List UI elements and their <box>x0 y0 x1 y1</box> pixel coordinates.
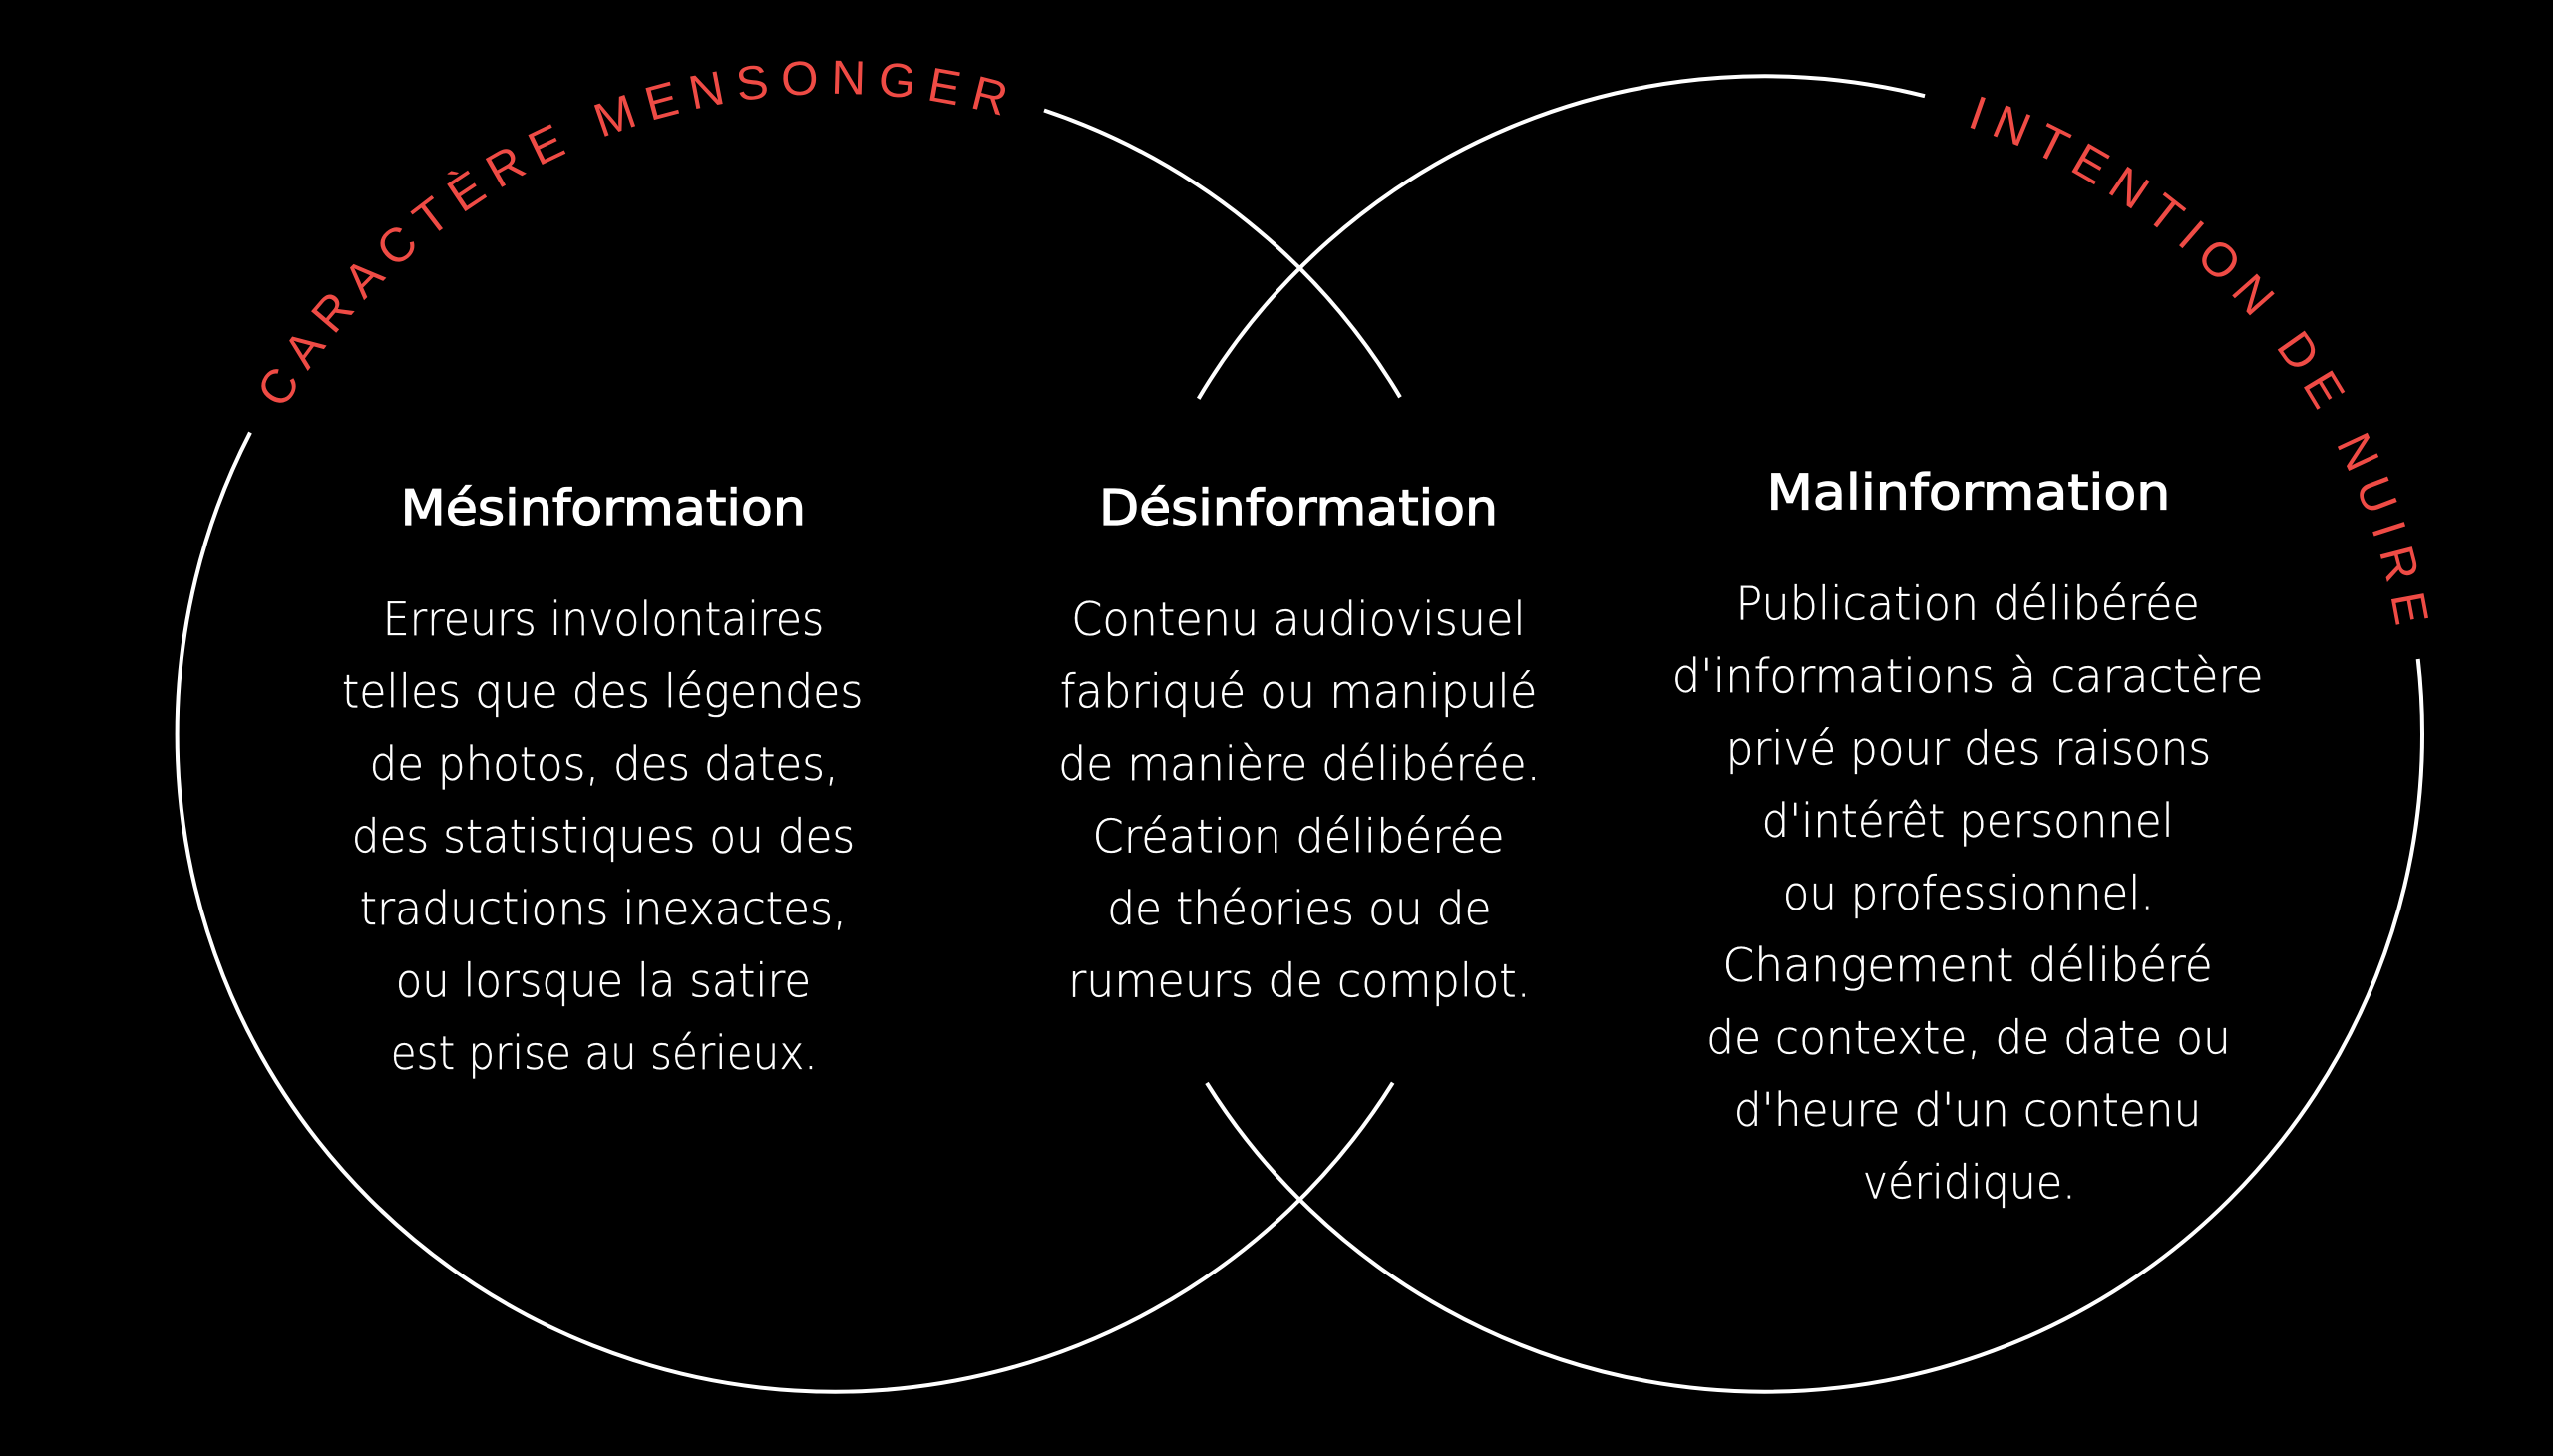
heading: malinformation: Malinformation <box>1767 465 2170 521</box>
text block: mésinformation description: telles que des légendes <box>342 664 863 718</box>
heading: mésinformation: Mésinformation <box>401 480 806 537</box>
text block: mésinformation description: de photos, des dates, <box>370 737 839 791</box>
heading: désinformation: Désinformation <box>1099 480 1498 537</box>
text block: malinformation description: d'informations à caractère <box>1672 649 2264 703</box>
text block: malinformation description: de contexte, de date ou <box>1706 1011 2231 1065</box>
text block: désinformation description: fabriqué ou manipulé <box>1060 664 1537 718</box>
panel: malinformation <box>1672 465 2264 1209</box>
text block: mésinformation description: est prise au sérieux. <box>391 1026 818 1080</box>
text block: malinformation description: Publication délibérée <box>1735 576 2200 630</box>
text block: mésinformation description: Erreurs involontaires <box>383 592 824 646</box>
text block: mésinformation description: des statistiques ou des <box>352 810 855 864</box>
text block: malinformation description: privé pour des raisons <box>1726 722 2211 776</box>
text block: malinformation description: d'intérêt personnel <box>1762 794 2174 848</box>
venn circle: left (caractère mensonger) <box>178 110 1400 1392</box>
text block: désinformation description: de théories ou de <box>1107 882 1492 935</box>
text block: mésinformation description <box>342 592 863 1080</box>
text block: désinformation description: Contenu audiovisuel <box>1071 592 1526 646</box>
text block: désinformation description <box>1058 592 1541 1007</box>
venn circle: right (intention de nuire) <box>1199 76 2422 1392</box>
text block: désinformation description: de manière délibérée. <box>1058 737 1541 791</box>
panel: désinformation <box>1058 480 1541 1007</box>
panel: mésinformation <box>342 480 863 1080</box>
text block: désinformation description: rumeurs de complot. <box>1068 953 1531 1007</box>
curved label: caractère mensonger: CARACTÈRE MENSONGER <box>261 60 1005 403</box>
text block: mésinformation description: ou lorsque la satire <box>396 953 811 1007</box>
text block: malinformation description: d'heure d'un contenu <box>1734 1083 2201 1137</box>
text block: malinformation description: ou professionnel. <box>1783 866 2154 919</box>
text block: malinformation description: Changement délibéré <box>1722 938 2213 992</box>
curved label: intention de nuire: INTENTION DE NUIRE <box>1971 96 2428 625</box>
text block: malinformation description <box>1672 576 2264 1209</box>
text block: mésinformation description: traductions inexactes, <box>360 882 847 935</box>
text block: malinformation description: véridique. <box>1863 1155 2076 1209</box>
text block: désinformation description: Création délibérée <box>1093 810 1505 864</box>
